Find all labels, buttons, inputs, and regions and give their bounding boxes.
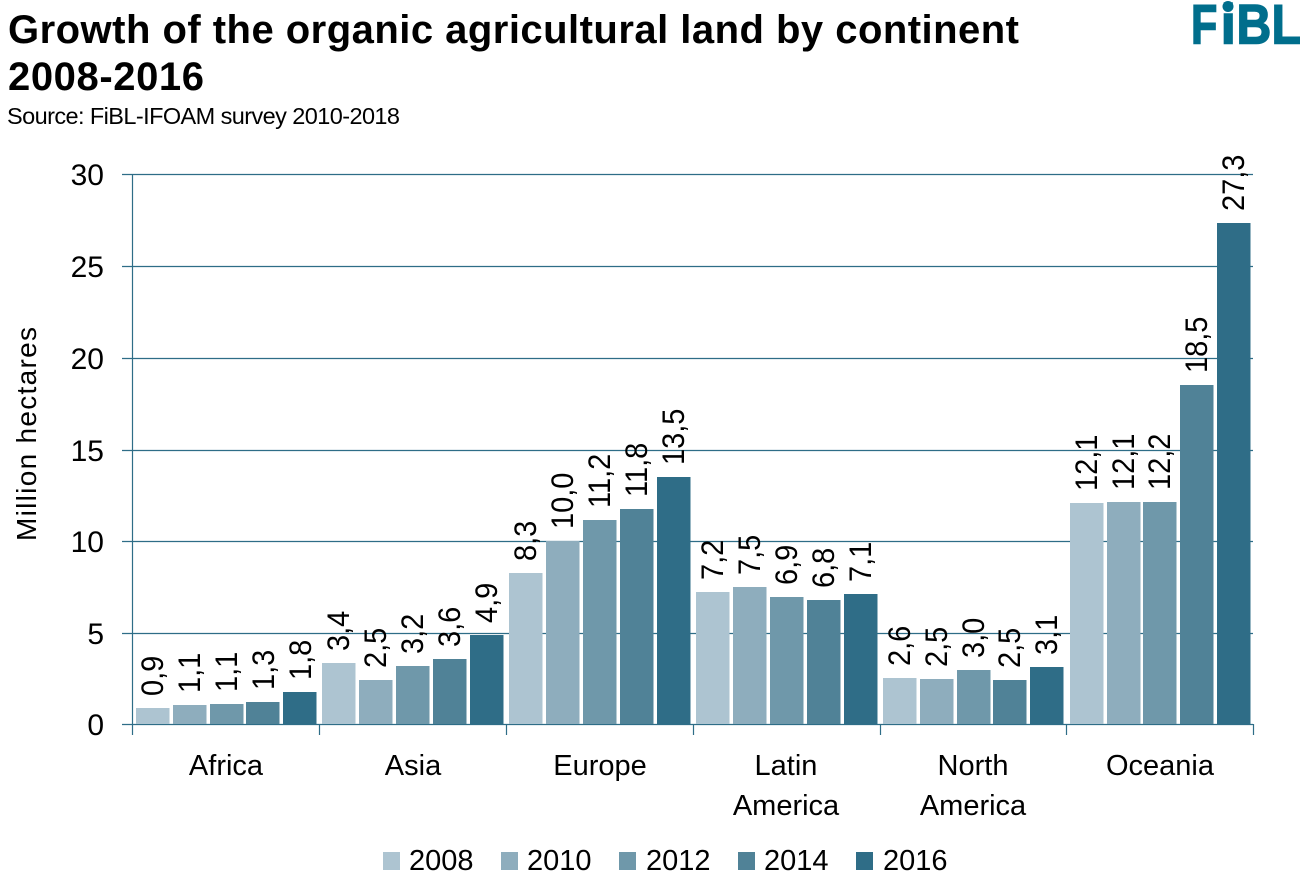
- data labels: 12,2: [1143, 434, 1177, 490]
- data labels: 18,5: [1180, 317, 1214, 373]
- data labels: 4,9: [470, 583, 504, 623]
- bars: Europe: [509, 477, 690, 724]
- bars: Asia: [322, 635, 504, 724]
- data labels: 12,1: [1107, 434, 1141, 490]
- y axis labels: 5: [87, 618, 104, 651]
- legend: 2012: [646, 845, 711, 877]
- data labels: 11,2: [583, 454, 617, 508]
- data labels: 27,3: [1217, 155, 1251, 211]
- bars: Africa: [136, 692, 316, 724]
- data labels: 3,0: [957, 618, 991, 658]
- data labels: 2,6: [883, 626, 917, 666]
- data labels: 3,1: [1030, 615, 1064, 655]
- data labels: 12,1: [1070, 435, 1104, 491]
- data labels: 6,9: [770, 545, 804, 585]
- source line: Source: FiBL-IFOAM survey 2010-2018: [7, 103, 400, 129]
- data labels: 0,9: [136, 656, 170, 696]
- y axis labels: 20: [71, 343, 104, 376]
- data labels: 13,5: [657, 409, 691, 465]
- title: Growth of the organic agricultural land by continent: [8, 8, 1019, 52]
- data labels: 2,5: [359, 628, 393, 668]
- data labels: 10,0: [546, 473, 580, 529]
- legend: [383, 845, 948, 877]
- logo: FiBL: [1191, 0, 1300, 56]
- data labels: 1,1: [173, 653, 207, 693]
- y axis labels: [71, 159, 104, 742]
- bar chart: [71, 155, 1254, 822]
- title: 2008-2016: [8, 55, 204, 99]
- bars: Latin America: [696, 587, 878, 724]
- y axis title: Million hectares: [11, 327, 42, 541]
- data labels: 3,4: [322, 611, 356, 651]
- category labels: America: [920, 790, 1027, 822]
- data labels: 1,1: [210, 652, 244, 692]
- bars: Oceania: [1070, 223, 1250, 724]
- legend: 2008: [409, 845, 474, 877]
- title: [8, 8, 1019, 99]
- data labels: 7,1: [844, 542, 878, 582]
- data labels: 11,8: [620, 443, 654, 497]
- category labels: [189, 750, 1215, 822]
- data labels: 8,3: [509, 521, 543, 561]
- category labels: Asia: [385, 750, 442, 782]
- data labels: 7,5: [733, 535, 767, 575]
- data labels: 3,6: [433, 607, 467, 647]
- y axis labels: 25: [71, 251, 104, 284]
- data labels: 6,8: [807, 548, 841, 588]
- y axis labels: 0: [87, 709, 104, 742]
- legend: 2010: [527, 845, 592, 877]
- category labels: Europe: [553, 750, 647, 782]
- y axis labels: 30: [71, 159, 104, 192]
- data labels: 1,3: [247, 650, 281, 690]
- legend: 2016: [883, 845, 948, 877]
- data labels: 3,2: [396, 614, 430, 654]
- category labels: America: [733, 790, 840, 822]
- category labels: Africa: [189, 750, 264, 782]
- category labels: Oceania: [1106, 750, 1215, 782]
- category labels: Latin: [755, 750, 817, 782]
- legend: 2014: [764, 845, 829, 877]
- y axis labels: 10: [71, 526, 104, 559]
- y axis labels: 15: [71, 435, 104, 468]
- data labels: [136, 155, 1251, 696]
- category labels: North: [938, 750, 1008, 782]
- data labels: 2,5: [993, 628, 1027, 668]
- bars: North America: [883, 667, 1064, 724]
- data labels: 7,2: [696, 540, 730, 580]
- data labels: 1,8: [284, 640, 318, 680]
- data labels: 2,5: [920, 627, 954, 667]
